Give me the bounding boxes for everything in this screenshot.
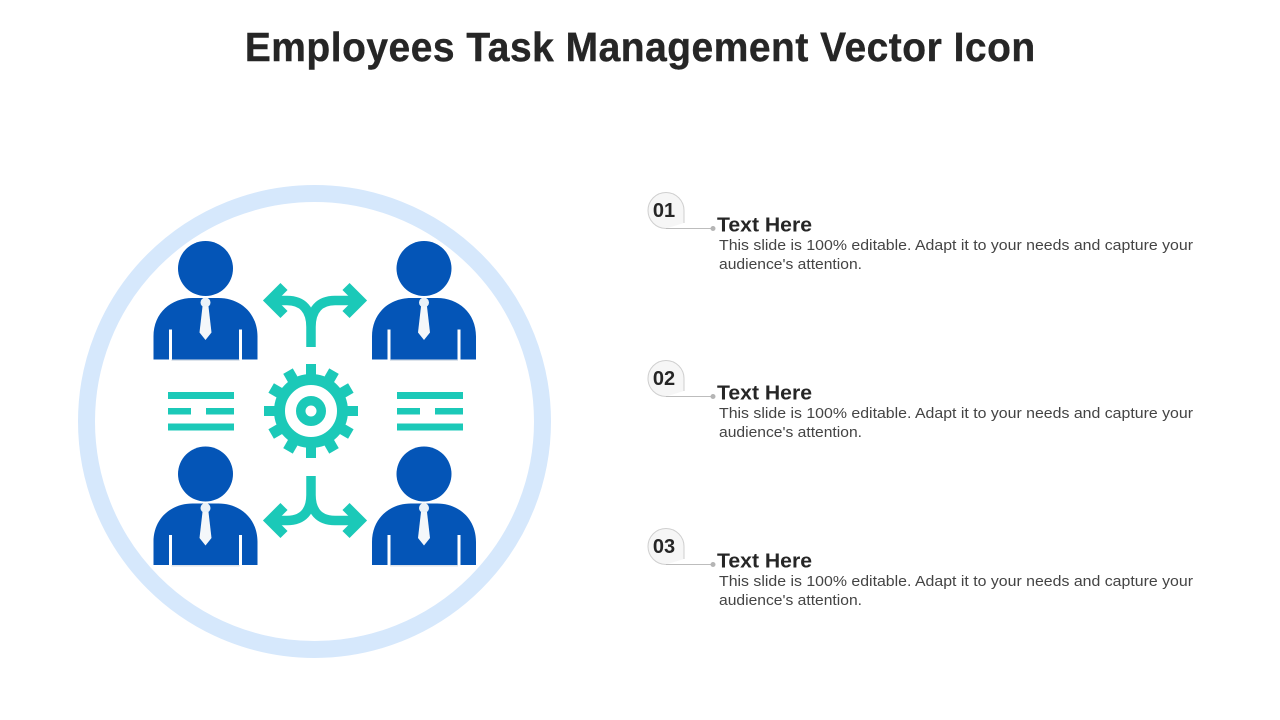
number badge 03 xyxy=(648,528,716,567)
item heading: Text Here xyxy=(717,382,812,404)
icon: employees task management xyxy=(86,194,542,650)
icon: person bottom right xyxy=(372,446,476,566)
icon: gear xyxy=(264,364,358,458)
item heading: Text Here xyxy=(717,550,812,572)
number badge 01: 01 xyxy=(653,200,675,222)
item 02 xyxy=(648,360,1193,441)
number badge 03: 03 xyxy=(653,536,675,558)
icon: text lines right xyxy=(397,392,463,430)
number badge 01 xyxy=(648,192,716,231)
icon: person top left xyxy=(154,241,258,361)
item text: This slide is 100% editable. Adapt it to your needs and capture your xyxy=(719,406,1193,422)
icon: person top right xyxy=(372,241,476,361)
icon: split arrows up xyxy=(270,286,360,347)
circle ring xyxy=(86,194,542,650)
item heading: Text Here xyxy=(717,214,812,236)
icon: person bottom left xyxy=(154,446,258,566)
number badge 02: 02 xyxy=(653,368,675,390)
item 01 xyxy=(648,192,1193,273)
number badge 02 xyxy=(648,360,716,399)
item text: This slide is 100% editable. Adapt it to your needs and capture your xyxy=(719,238,1193,254)
item text: audience's attention. xyxy=(719,257,862,273)
item text: audience's attention. xyxy=(719,425,862,441)
icon: split arrows down xyxy=(270,476,360,534)
item text: audience's attention. xyxy=(719,593,862,609)
title: Employees Task Management Vector Icon xyxy=(245,25,1035,70)
item 03 xyxy=(648,528,1193,609)
icon: text lines left xyxy=(168,392,234,430)
item text: This slide is 100% editable. Adapt it to your needs and capture your xyxy=(719,574,1193,590)
